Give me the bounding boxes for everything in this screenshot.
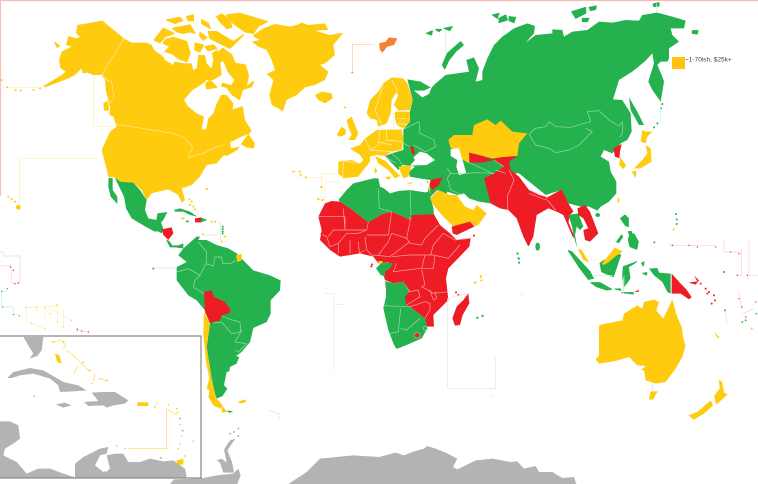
bolivia — [204, 290, 231, 323]
southern africa — [383, 281, 427, 349]
baja california — [108, 178, 117, 204]
caspian sea — [451, 147, 466, 175]
lesotho — [414, 333, 420, 338]
australia — [596, 299, 686, 384]
inset: hispaniola — [84, 392, 128, 408]
laos, vietnam, cambodia — [577, 205, 598, 242]
africa borders — [318, 208, 470, 318]
greenland — [252, 23, 343, 112]
united kingdom — [347, 117, 358, 140]
central america and caribbean — [150, 189, 225, 269]
kazakhstan — [448, 119, 527, 163]
europe — [337, 77, 430, 197]
inset: bahamas — [52, 340, 177, 449]
myanmar — [555, 190, 575, 238]
south asia red block — [469, 153, 575, 247]
asia borders — [385, 111, 622, 195]
baltic states — [395, 112, 410, 128]
russia, china and asia mainland — [385, 13, 686, 211]
atlantic and pacific island dots — [2, 80, 345, 202]
ireland — [337, 127, 346, 137]
black sea — [410, 152, 435, 166]
europe borders — [340, 80, 410, 178]
inset: andros — [55, 354, 62, 364]
sub-saharan red block — [318, 201, 471, 327]
gabon and congo — [376, 262, 393, 277]
canada, usa and alaska mainland — [43, 21, 252, 203]
new guinea and pacific — [447, 239, 758, 420]
papua new guinea — [672, 274, 692, 299]
africa — [318, 178, 487, 349]
legend swatch — [672, 57, 685, 69]
taiwan — [617, 196, 620, 204]
italy — [375, 156, 400, 178]
sri lanka — [535, 243, 540, 251]
antarctica — [170, 429, 576, 484]
hainan — [595, 213, 600, 217]
north africa — [338, 178, 434, 222]
south korea — [619, 157, 626, 169]
mexico — [115, 178, 167, 232]
new caledonia — [714, 331, 720, 338]
caribbean inset — [0, 336, 201, 478]
thailand — [568, 213, 583, 248]
sakhalin — [629, 97, 644, 125]
inset: florida — [23, 337, 43, 359]
pacific leader lines — [0, 252, 88, 333]
canadian arctic islands — [55, 13, 267, 148]
new britain — [688, 275, 699, 285]
inset: trinidad — [177, 459, 183, 465]
inset: lake maracaibo — [102, 463, 109, 472]
syria — [430, 177, 442, 190]
indonesian and philippine islands — [568, 215, 647, 294]
west new guinea — [649, 268, 671, 294]
pacific leader lines — [670, 239, 758, 314]
iceland — [315, 92, 333, 103]
solomon and pacific dots — [529, 244, 715, 304]
north korea — [613, 144, 622, 158]
south-east asia — [518, 190, 677, 294]
scandinavia — [367, 77, 413, 127]
madagascar — [452, 293, 469, 326]
malay peninsula — [578, 248, 589, 263]
inset: south america coast — [75, 447, 187, 477]
svalbard — [379, 37, 397, 53]
inset: cuba — [7, 368, 87, 392]
inset: central america — [0, 421, 75, 477]
arabian peninsula — [430, 190, 487, 227]
socotra and island dots — [322, 234, 474, 295]
eurasia — [379, 3, 698, 247]
french guiana — [236, 254, 242, 262]
yemen — [452, 222, 474, 235]
legend label: ~1-70ish, $25k+ — [685, 56, 732, 64]
grey leader lines — [268, 294, 345, 419]
greece and med islands — [360, 165, 430, 197]
arctic islands — [426, 3, 698, 69]
inset: puerto rico — [137, 402, 148, 406]
moldova — [410, 147, 415, 154]
south america borders — [177, 242, 247, 352]
kuril dots — [654, 32, 694, 127]
leader lines: north america — [0, 75, 338, 205]
tasmania — [649, 391, 658, 400]
malaysian borneo — [602, 247, 623, 265]
south america — [0, 237, 345, 419]
north america borders — [102, 38, 223, 157]
japan — [632, 130, 652, 178]
new zealand — [688, 400, 713, 420]
equatorial guinea — [378, 261, 383, 263]
legend — [672, 56, 732, 69]
timor — [634, 290, 639, 292]
inset: jamaica — [56, 403, 72, 408]
chile — [203, 312, 223, 409]
north america — [0, 13, 373, 232]
continental europe — [338, 129, 403, 178]
